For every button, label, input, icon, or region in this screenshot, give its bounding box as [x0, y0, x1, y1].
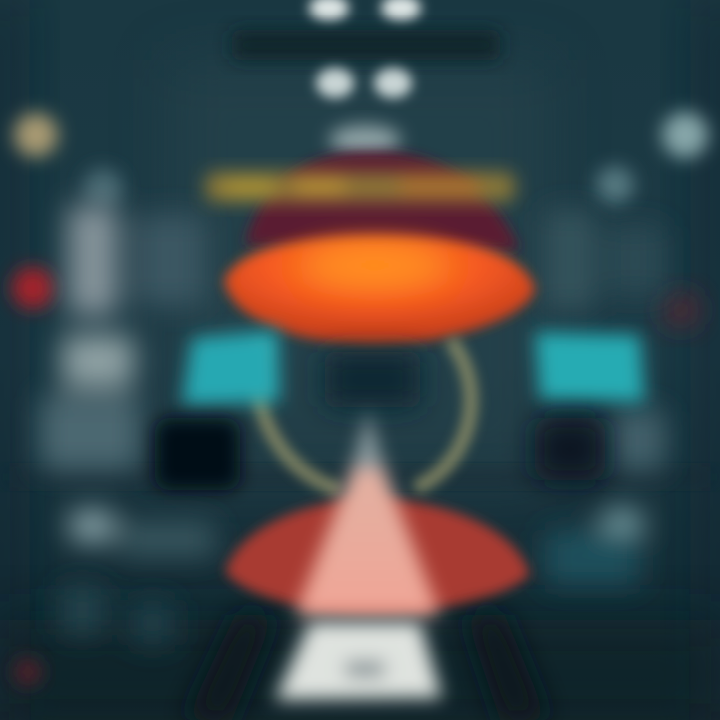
cyan box left	[182, 330, 280, 405]
right panel: text columns	[545, 210, 665, 470]
white base block	[275, 622, 442, 700]
subtitle: small label	[329, 125, 401, 155]
icon: pale circle right	[662, 112, 708, 158]
title: dark headline band	[232, 30, 500, 60]
orange dome	[224, 235, 535, 345]
icon: yellow circle left	[14, 113, 58, 157]
icon: small circle left	[83, 168, 123, 208]
red dome	[225, 498, 530, 612]
center pink triangle	[295, 410, 440, 615]
title: top line	[309, 0, 421, 21]
center dark panel	[325, 352, 420, 407]
maroon dome	[245, 152, 520, 250]
small red mark bottom left	[14, 658, 42, 686]
subtitle: light words	[316, 68, 412, 98]
black block left	[155, 418, 240, 490]
black block right	[535, 418, 605, 480]
gold ring	[257, 340, 471, 490]
left panel: text columns	[40, 205, 205, 470]
yellow heading band	[205, 172, 515, 202]
lower light labels	[68, 508, 644, 585]
cyan box right	[535, 332, 645, 402]
icon: red circle left	[12, 267, 54, 309]
icon: small circle right	[596, 166, 634, 204]
lower left faint blocks	[60, 585, 175, 645]
bottom converging stripes	[185, 615, 548, 720]
icon: dark red circle right	[664, 293, 698, 327]
